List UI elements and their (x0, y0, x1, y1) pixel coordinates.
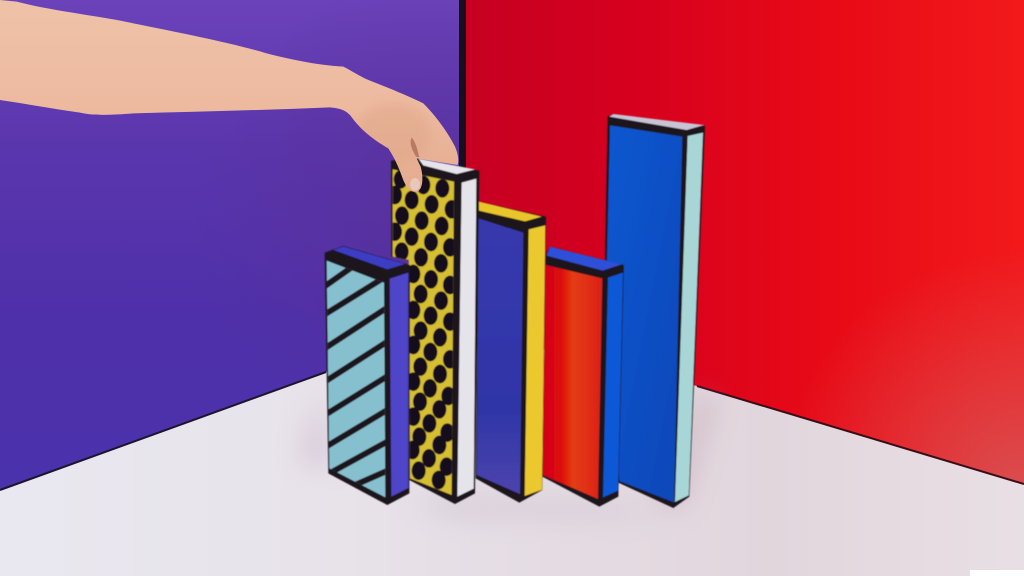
box shadows on floor (300, 390, 715, 516)
blue box body (605, 114, 705, 508)
red box side face (603, 273, 623, 497)
red box front face (543, 265, 602, 499)
striped box body (325, 246, 410, 505)
red wall base edge (697, 386, 1024, 484)
diagonal stripes (323, 265, 388, 485)
indigo box side face (525, 225, 545, 496)
blue box top face (609, 114, 704, 130)
polka box yellow face (393, 169, 454, 495)
indigo box body (476, 202, 546, 503)
indigo box front face (477, 218, 523, 494)
blue box side face (675, 133, 703, 502)
striped bar box (323, 246, 410, 505)
polka dot bar box (388, 159, 479, 504)
purple wall base edge (0, 372, 326, 490)
polka box side face (457, 179, 476, 497)
wall corner edge (459, 0, 466, 170)
arm and hand (0, 0, 458, 192)
striped box teal face (327, 261, 385, 497)
hand shading (362, 106, 425, 162)
white corner block (970, 570, 1024, 576)
blue box front face (607, 125, 682, 502)
purple wall (0, 0, 461, 490)
red bar box (542, 247, 624, 507)
striped box top face (333, 247, 405, 269)
red wall (464, 0, 1024, 483)
forearm and hand shape (0, 0, 458, 192)
floor (0, 360, 1024, 576)
indigo bar box (476, 202, 546, 503)
polka dots (388, 170, 459, 489)
red box top face (547, 247, 622, 271)
gap between fingers (411, 137, 419, 157)
polka box body (391, 159, 479, 504)
tallest bar: blue box (605, 114, 705, 508)
fingernail (410, 178, 420, 191)
polka box top face (418, 159, 475, 174)
red box body (542, 247, 624, 507)
indigo box top face (479, 202, 542, 221)
all five bar boxes (323, 114, 705, 508)
striped box side face (390, 273, 408, 497)
